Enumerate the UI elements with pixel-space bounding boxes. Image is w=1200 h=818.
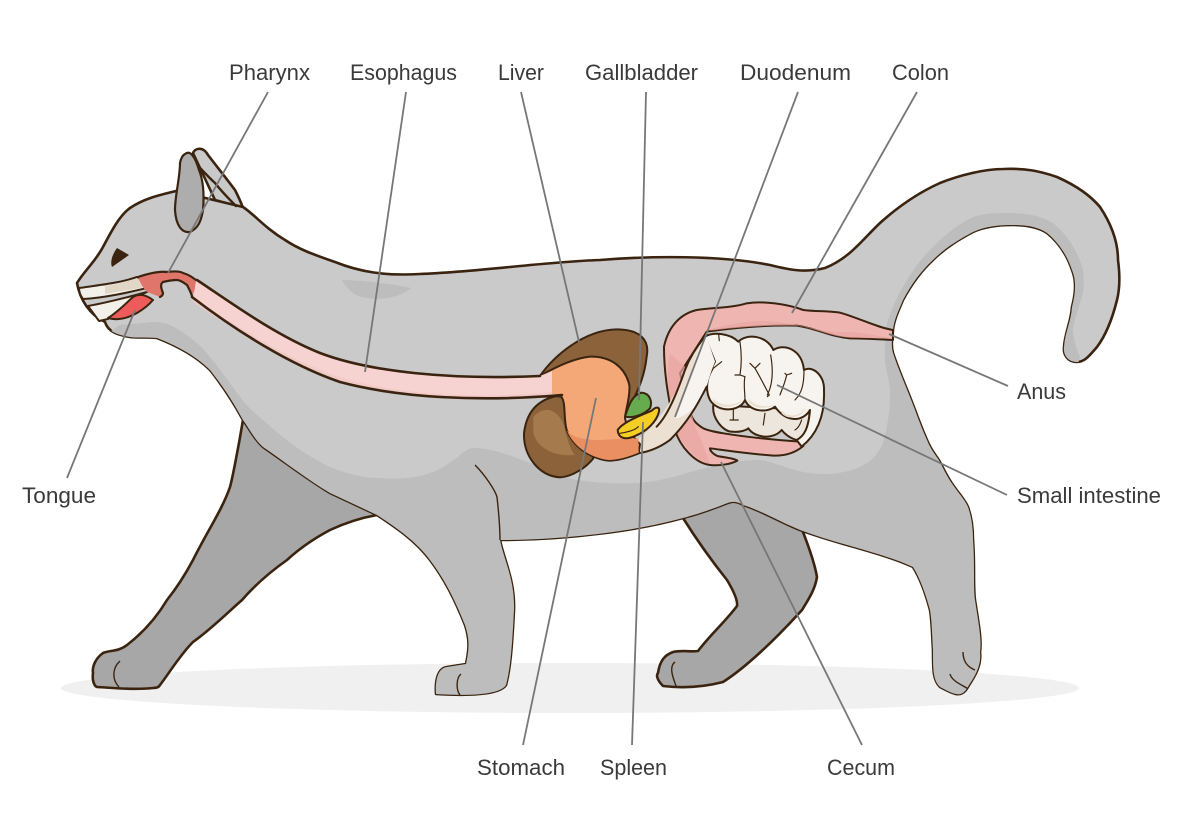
pharynx [138,271,198,297]
label: Cecum: Cecum [827,755,895,780]
upper palate [79,277,147,299]
far ear [193,149,243,208]
cat illustration [77,149,1119,720]
spleen seam [620,427,638,433]
far front leg [93,420,377,689]
duodenum highlight [675,337,715,418]
colon [664,302,893,465]
lower jaw [88,292,147,321]
stomach [540,357,640,461]
front loop seams [707,334,804,400]
label: Stomach: Stomach [477,755,565,780]
paw toe lines [114,652,975,695]
label: Pharynx: Pharynx [229,60,310,85]
label: Liver: Liver [498,60,544,85]
far hind leg [657,495,817,687]
body [77,169,1119,695]
esophagus shade [193,298,552,398]
label: Duodenum: Duodenum [740,60,851,85]
label: Tongue: Tongue [22,483,96,508]
label: Esophagus: Esophagus [350,60,457,85]
liver upper lobe [540,329,647,407]
mouth and pharynx [79,271,198,321]
label: Colon: Colon [892,60,949,85]
liver lower lobe [524,395,593,477]
colon shade [668,321,892,464]
leg fold line [475,465,500,540]
small intestine front loops [705,334,824,447]
esophagus outline [192,280,562,398]
intestine cream shading [713,398,807,418]
pharynx outline [138,271,198,297]
tongue [108,295,153,319]
duodenum [638,337,715,453]
gallbladder [625,393,651,417]
esophagus [193,280,562,398]
label: Spleen: Spleen [600,755,667,780]
digestive organs [524,302,893,477]
leader lines [67,92,1008,745]
palate beige [105,278,145,294]
label: Anus: Anus [1017,379,1066,404]
stomach lower shade [567,430,639,460]
label: Gallbladder: Gallbladder [585,60,698,85]
small intestine back loops [713,405,810,440]
spleen [618,408,659,438]
duodenum outline [638,337,707,453]
near ear [175,153,204,232]
eye [111,248,129,267]
scapula mark [342,280,411,299]
ground shadow [61,663,1079,713]
head top edge by ear [190,158,236,206]
body shading [105,213,1084,720]
label: Small intestine: Small intestine [1017,483,1161,508]
liver highlight [533,410,575,455]
back loop seams [730,410,802,430]
